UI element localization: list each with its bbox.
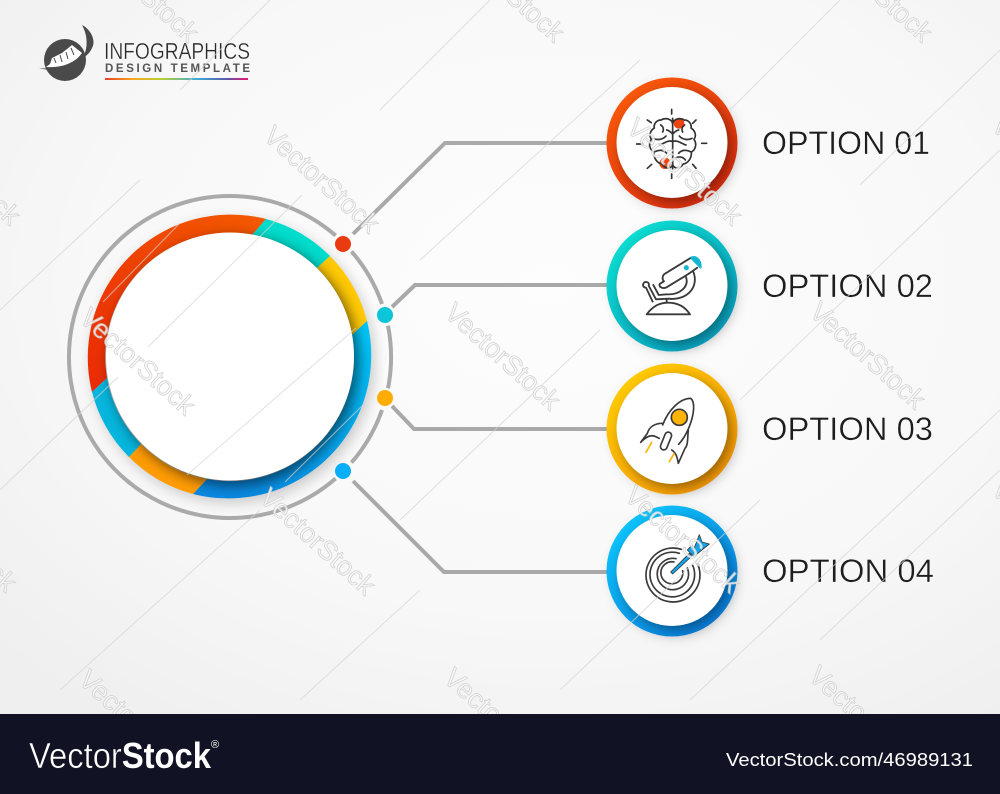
option 01 badge xyxy=(606,78,740,211)
watermarks: VectorStock xyxy=(439,297,566,416)
segment: teal xyxy=(252,219,330,268)
watermarks: VectorStock xyxy=(73,664,200,783)
logo title: INFOGRAPHICS xyxy=(104,38,250,64)
logo xyxy=(39,25,250,81)
option 03 badge xyxy=(606,364,740,497)
footer id: VectorStock.com/46989131 xyxy=(726,750,973,770)
footer bar xyxy=(0,714,1000,794)
segment: cyan xyxy=(92,378,141,457)
icon: rocket xyxy=(641,398,694,463)
watermarks: VectorStock xyxy=(619,480,746,599)
icon: microscope xyxy=(643,257,701,314)
label: option 04: OPTION 04 xyxy=(762,553,934,589)
watermarks: VectorStock xyxy=(621,112,748,231)
watermarks: VectorStock xyxy=(804,296,931,415)
centre white circle xyxy=(106,232,354,480)
label: option 02: OPTION 02 xyxy=(762,268,933,304)
segment: red xyxy=(88,215,266,392)
option 04 badge xyxy=(606,506,740,639)
logo mark xyxy=(39,25,94,81)
segment: blue xyxy=(193,321,371,498)
footer logo: VectorStock xyxy=(29,735,212,776)
rainbow rule xyxy=(105,78,248,80)
watermarks: VectorStock xyxy=(258,120,385,239)
watermarks: VectorStock xyxy=(438,662,565,781)
outer thin ring xyxy=(69,196,391,518)
label: option 03: OPTION 03 xyxy=(762,411,933,447)
segment: yellow xyxy=(317,256,367,335)
watermarks: VectorStock xyxy=(74,302,201,421)
icon: brain xyxy=(637,109,707,178)
watermarks: VectorStock xyxy=(803,660,930,779)
watermarks: VectorStock xyxy=(254,482,381,601)
option 02 badge xyxy=(606,220,740,354)
main circle: coloured ring xyxy=(88,215,376,504)
registered mark: ® xyxy=(211,739,219,751)
label: option 01: OPTION 01 xyxy=(762,125,930,161)
option labels xyxy=(762,125,934,589)
logo subtitle: DESIGN TEMPLATE xyxy=(105,63,250,75)
connector lines xyxy=(353,143,612,572)
icon: target xyxy=(646,535,709,602)
segment: orange xyxy=(129,444,207,494)
ring dots xyxy=(335,236,393,479)
